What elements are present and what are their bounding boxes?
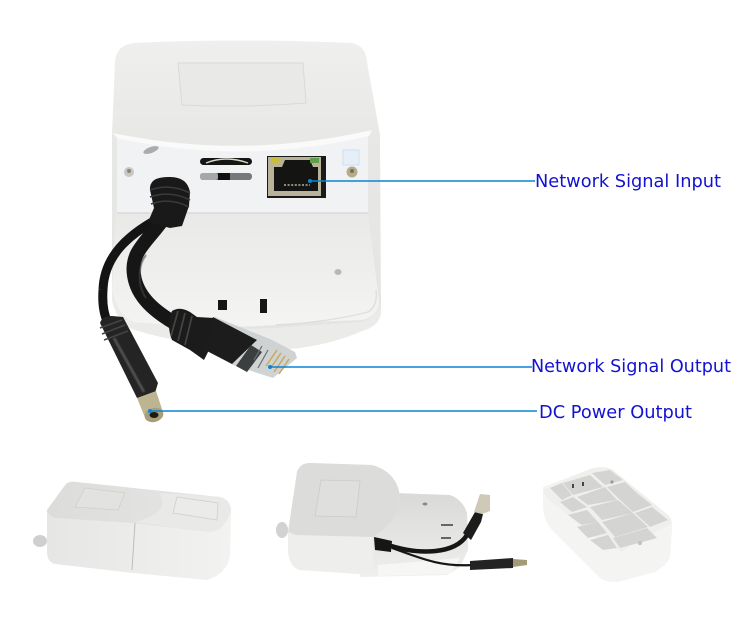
product photo: closed case [33, 482, 231, 580]
flap hole [334, 269, 342, 275]
callout: network signal input [308, 171, 721, 192]
callout: network signal output [268, 356, 731, 377]
callout: DC power output [148, 402, 692, 423]
tab [33, 535, 47, 547]
tray marks [441, 524, 453, 526]
RJ45 cable plug [169, 309, 297, 378]
screw left [124, 167, 134, 177]
tray [360, 493, 468, 577]
RJ45 network port [267, 156, 326, 198]
DC jack [470, 558, 513, 570]
callout: network signal output: Network Signal Output [531, 356, 731, 377]
slots and holes [573, 482, 583, 488]
status slots [200, 158, 252, 180]
case body [47, 482, 231, 580]
cable to RJ45 plug [133, 215, 178, 325]
small sticker [343, 150, 359, 165]
screw right [346, 166, 358, 178]
main product photo: PoE splitter [100, 40, 381, 424]
product photo: open case with cables [276, 463, 527, 577]
product photo: back of case with ribs [543, 467, 672, 582]
panel mark [142, 144, 160, 156]
cover [288, 463, 400, 575]
tab [276, 522, 288, 538]
rib cells [550, 470, 668, 550]
callout: network signal input: Network Signal Input [535, 171, 721, 192]
strain relief boot [148, 177, 190, 228]
flap slots [218, 300, 227, 310]
cables [385, 535, 467, 551]
callout: DC power output: DC Power Output [539, 402, 692, 423]
mounting flap [112, 213, 379, 327]
housing body [112, 40, 381, 349]
rear panel [117, 134, 368, 213]
rib face [543, 467, 672, 551]
cable to DC plug [103, 222, 152, 323]
DC power plug [100, 316, 165, 424]
shell [543, 467, 672, 582]
